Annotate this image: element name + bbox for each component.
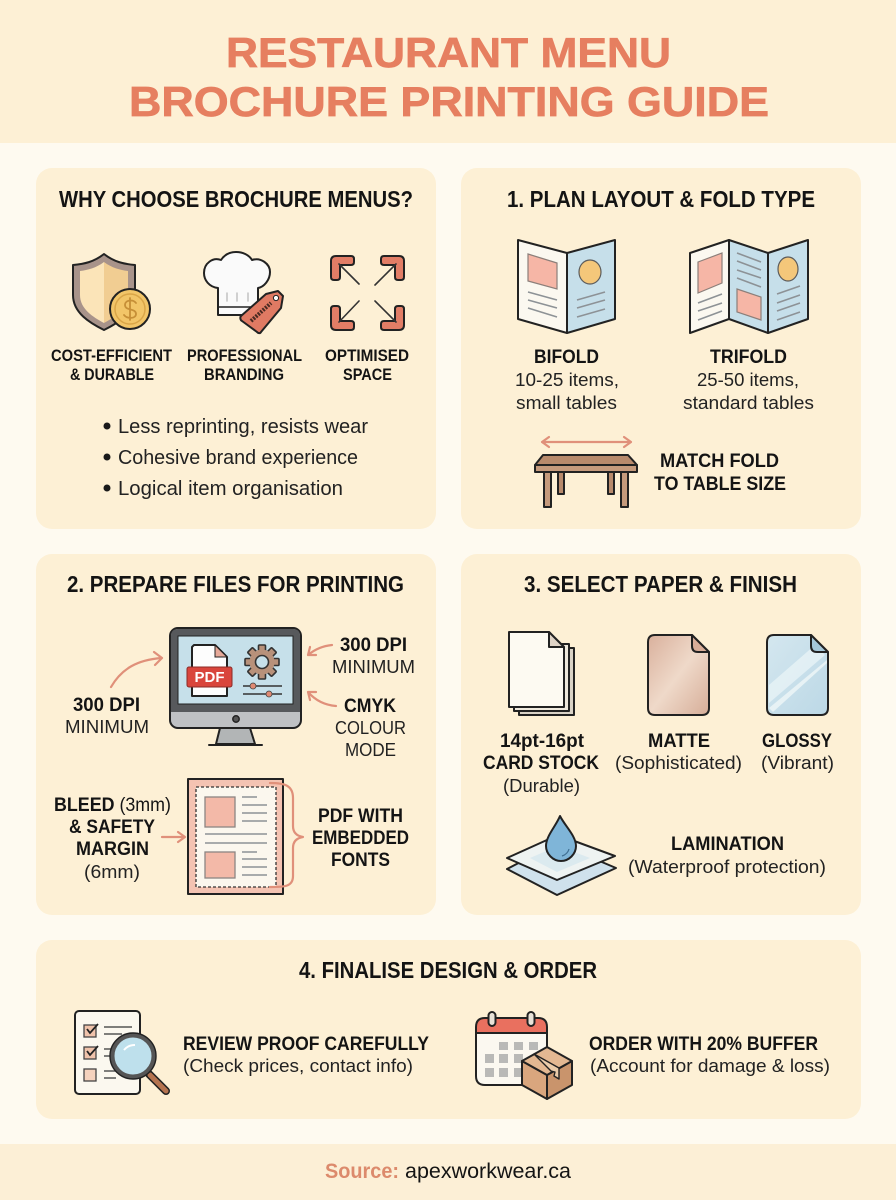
title: BROCHURE PRINTING GUIDE — [129, 78, 769, 125]
label: trifold — [683, 347, 814, 413]
source line — [325, 1160, 571, 1183]
label: lamination: LAMINATION — [671, 834, 784, 855]
bullet list: Cohesive brand experience — [118, 447, 358, 469]
label: cost-efficient: COST-EFFICIENT — [51, 347, 172, 365]
label: matte: MATTE — [648, 731, 710, 752]
icon: chef hat with tag — [204, 252, 283, 333]
label: 300 dpi right: 300 DPI — [340, 635, 407, 656]
label: cmyk: COLOUR — [335, 717, 406, 738]
label: professional branding: BRANDING — [204, 366, 284, 384]
label: 300 dpi left: 300 DPI — [73, 695, 140, 716]
icon: expand arrows — [331, 256, 404, 330]
heading: prepare files: 2. PREPARE FILES FOR PRINTING — [67, 571, 404, 597]
arrow: to monitor lower right — [308, 692, 336, 706]
label: trifold: TRIFOLD — [710, 347, 787, 368]
label: bleed and safety margin: (6mm) — [84, 861, 140, 882]
icon: checklist with magnifier — [75, 1011, 166, 1094]
arrow: to page — [162, 832, 185, 842]
label: optimised space: OPTIMISED — [325, 347, 409, 365]
icon: table — [535, 455, 637, 507]
label: 300 dpi right — [332, 635, 415, 677]
label: bifold: small tables — [516, 392, 617, 413]
arrow: to monitor top right — [308, 645, 332, 655]
bullet list: Logical item organisation — [118, 478, 343, 500]
label: bleed and safety margin: & SAFETY — [69, 817, 155, 838]
label: lamination: (Waterproof protection) — [628, 856, 826, 877]
icon: bifold brochure — [518, 240, 615, 333]
panel: prepare files — [36, 554, 436, 915]
arrow: to monitor left — [111, 652, 162, 687]
heading: why choose: WHY CHOOSE BROCHURE MENUS? — [59, 186, 413, 212]
label: bifold — [515, 347, 619, 413]
source line: apexworkwear.ca — [405, 1160, 571, 1183]
label: trifold: standard tables — [683, 392, 814, 413]
label: glossy: (Vibrant) — [761, 752, 834, 773]
header band — [0, 0, 896, 143]
icon: shield and coin — [73, 254, 150, 330]
label: optimised space — [325, 347, 409, 384]
icon: glossy paper — [767, 635, 828, 715]
label: bleed and safety margin: MARGIN — [76, 839, 149, 860]
label: matte: (Sophisticated) — [615, 752, 742, 773]
label: bleed and safety margin: BLEED (3mm) — [54, 795, 171, 816]
label: bifold: BIFOLD — [534, 347, 599, 368]
label: card stock: (Durable) — [503, 775, 580, 796]
label: match fold — [654, 451, 786, 495]
panel: finalise design and order — [36, 940, 861, 1119]
bullet list: Less reprinting, resists wear — [118, 416, 368, 438]
heading: select paper: 3. SELECT PAPER & FINISH — [524, 571, 797, 597]
label: match fold: MATCH FOLD — [660, 451, 779, 472]
label: 300 dpi left: MINIMUM — [65, 716, 149, 737]
icon: monitor — [170, 628, 301, 745]
label: glossy: GLOSSY — [762, 731, 832, 752]
heading: plan layout: 1. PLAN LAYOUT & FOLD TYPE — [507, 186, 815, 212]
source line: Source: — [325, 1160, 399, 1183]
label: pdf with embedded fonts: FONTS — [331, 850, 390, 871]
label: review proof — [183, 1034, 429, 1076]
footer band — [0, 1144, 896, 1200]
brace — [270, 783, 303, 887]
label: optimised space: SPACE — [343, 366, 392, 384]
panel: select paper and finish — [461, 554, 861, 915]
label: order with buffer: ORDER WITH 20% BUFFER — [589, 1034, 818, 1055]
label: cost-efficient: & DURABLE — [70, 366, 154, 384]
title: RESTAURANT MENU — [226, 29, 671, 76]
label: bleed and safety margin — [54, 795, 171, 882]
label: trifold: 25-50 items, — [697, 369, 799, 390]
label: card stock: CARD STOCK — [483, 753, 599, 774]
label: cmyk — [335, 696, 406, 760]
label: glossy — [761, 731, 834, 773]
icon: trifold brochure — [690, 240, 808, 333]
panel: why choose brochure menus — [36, 168, 436, 529]
label: order with buffer — [589, 1034, 830, 1076]
label: cmyk: MODE — [345, 739, 396, 760]
bullet list — [104, 416, 368, 500]
label: review proof: (Check prices, contact info) — [183, 1055, 413, 1076]
label: cmyk: CMYK — [344, 696, 396, 717]
label: 300 dpi left — [65, 695, 149, 737]
label: matte — [615, 731, 742, 773]
label: 300 dpi right: MINIMUM — [332, 656, 415, 677]
label: match fold: TO TABLE SIZE — [654, 474, 786, 495]
icon: matte paper — [648, 635, 709, 715]
arrow: table width — [542, 437, 631, 447]
icon: card stock — [509, 632, 574, 715]
icon: page with bleed — [188, 779, 283, 894]
label: pdf with embedded fonts — [312, 806, 409, 871]
icon: pdf file: PDF — [194, 669, 224, 686]
label: card stock: 14pt-16pt — [500, 731, 585, 752]
icon: sliders — [243, 683, 282, 697]
panel: plan layout and fold type — [461, 168, 861, 529]
title — [129, 29, 769, 125]
label: review proof: REVIEW PROOF CAREFULLY — [183, 1034, 429, 1055]
label: bifold: 10-25 items, — [515, 369, 619, 390]
label: pdf with embedded fonts: PDF WITH — [318, 806, 403, 827]
label: professional branding — [187, 347, 302, 384]
icon: calendar and box — [476, 1012, 572, 1099]
label: order with buffer: (Account for damage & loss) — [590, 1055, 830, 1076]
label: professional branding: PROFESSIONAL — [187, 347, 302, 365]
heading: finalise: 4. FINALISE DESIGN & ORDER — [299, 957, 597, 983]
label: card stock — [483, 731, 599, 796]
icon: lamination — [507, 816, 616, 895]
icon: gear — [245, 645, 279, 679]
label: cost-efficient — [51, 347, 172, 384]
label: lamination — [628, 834, 826, 877]
label: pdf with embedded fonts: EMBEDDED — [312, 828, 409, 849]
